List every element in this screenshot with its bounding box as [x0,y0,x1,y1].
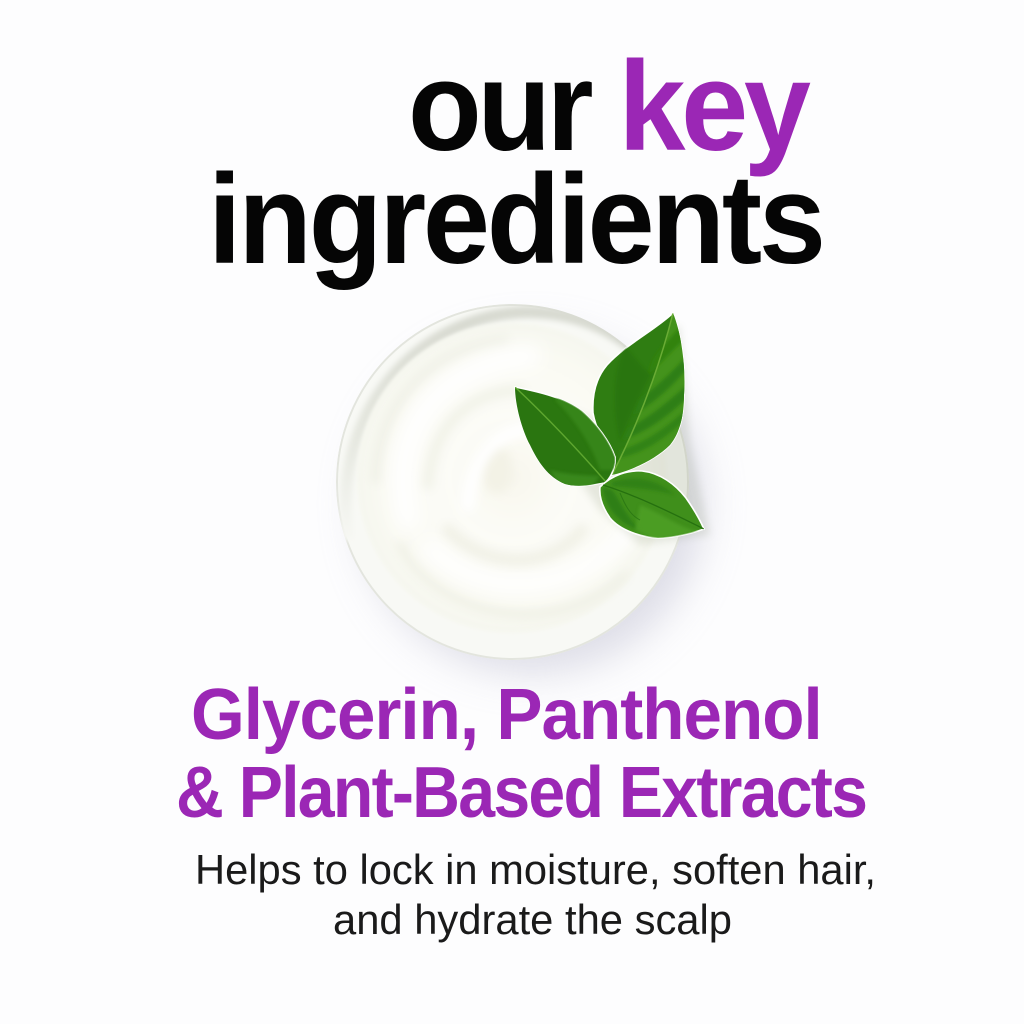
leaf: top [592,313,686,476]
leaf shadow [520,325,710,545]
leaf: bottom [600,471,704,540]
bowl of cream with leaves [336,304,710,674]
cream swirl [376,340,640,614]
leaf: left [510,387,620,490]
description line 1: Helps to lock in moisture, soften hair, [195,846,876,893]
description line 2: and hydrate the scalp [333,896,732,943]
bowl rim [336,304,689,660]
bowl shadow [360,334,704,674]
title [208,36,823,291]
heading line 1: Glycerin, Panthenol [191,674,822,754]
cream [357,323,667,633]
description [195,846,876,943]
heading line 2: & Plant-Based Extracts [176,751,866,833]
title line: ingredients: ingredients [208,149,823,291]
title line: our key: our key [408,36,811,178]
heading: ingredient names [176,674,866,833]
